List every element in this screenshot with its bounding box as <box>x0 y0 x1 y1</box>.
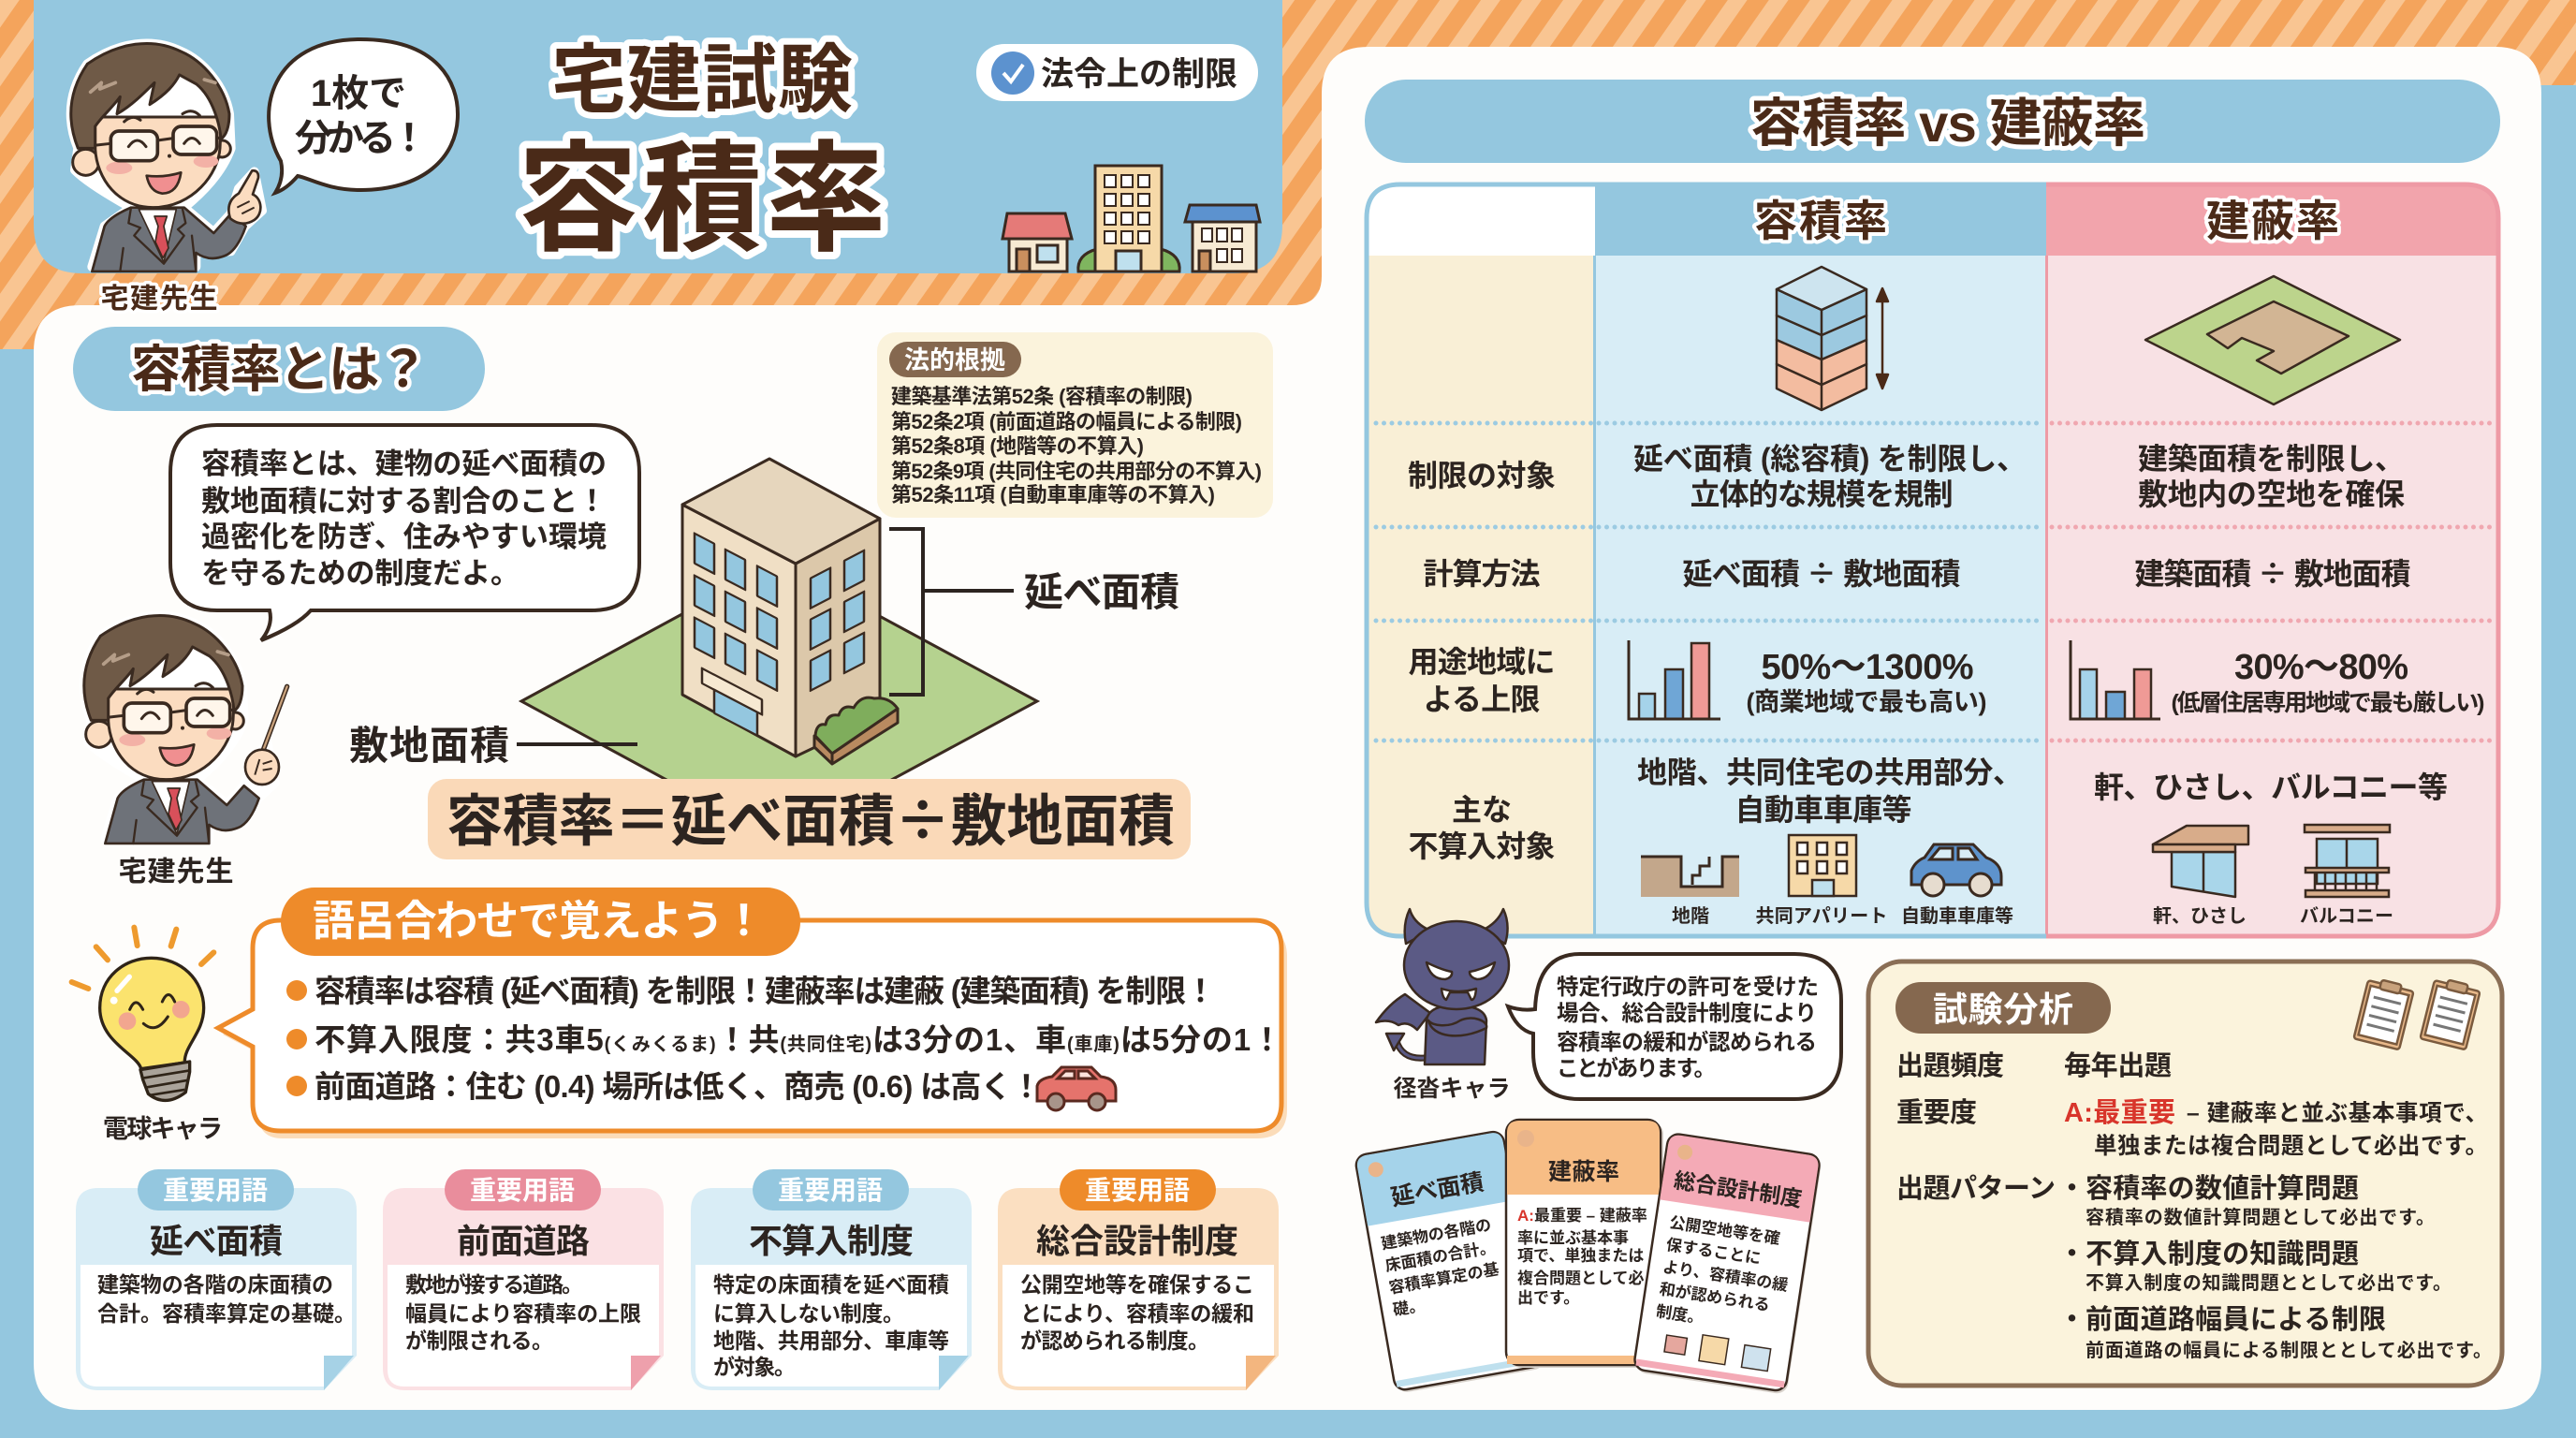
bracket: total floor area <box>889 529 1014 695</box>
card: building coverage: 複合問題として必 <box>1517 1269 1644 1287</box>
heading tag: 語呂合わせで覚えよう！ <box>313 897 765 945</box>
term card: front road: が制限される。 <box>405 1328 553 1353</box>
panel: exam analysis: ・ <box>2058 1240 2086 1269</box>
term card: comprehensive design: が認められる制度。 <box>1020 1328 1209 1353</box>
row: zoning limits: 30%〜80% <box>2234 648 2408 687</box>
row: calculation: 建築面積 ÷ 敷地面積 <box>2134 550 2411 594</box>
term card: total floor area: 延べ面積 <box>150 1222 283 1260</box>
illustration: building on site <box>349 459 1179 841</box>
panel: legal basis <box>877 332 1273 518</box>
label: total floor area: 延べ面積 <box>1024 570 1179 614</box>
card: building coverage: 建蔽率 <box>1548 1159 1619 1185</box>
panel: exam analysis: A:最重要 <box>2064 1097 2175 1128</box>
panel: exam analysis: 不算入制度の知識問題 <box>2086 1239 2359 1269</box>
panel: exam analysis: 前面道路の幅員による制限ととして必出です。 <box>2086 1340 2492 1361</box>
card: comprehensive design: 保することに <box>1665 1236 1762 1268</box>
term card: front road: 敷地が接する道路。 <box>405 1272 583 1297</box>
card: comprehensive design: 総合設計制度 <box>1673 1168 1804 1211</box>
label: devil name: 径沓キャラ <box>1393 1076 1511 1102</box>
badge: legal restrictions: 法令上の制限 <box>1041 56 1237 93</box>
term card: total floor area <box>76 1169 357 1390</box>
icon: blue car <box>1911 844 2001 896</box>
tag: exam analysis: 試験分析 <box>1933 990 2073 1029</box>
term card: exclusion system: 重要用語 <box>778 1176 883 1205</box>
heading bar: FAR vs BCR: 容積率 vs 建蔽率 <box>1750 94 2145 153</box>
card: comprehensive design: 制度。 <box>1655 1302 1705 1328</box>
label: balcony: バルコニー <box>2300 905 2393 927</box>
planter <box>815 697 898 754</box>
card: comprehensive design: より、容積率の緩 <box>1661 1257 1790 1295</box>
speech bubble: one page: 1枚で <box>311 73 406 114</box>
row: calculation <box>1423 550 2411 594</box>
row: restricted target: 敷地内の空地を確保 <box>2138 477 2405 511</box>
column header: BCR: 建蔽率 <box>2206 197 2339 245</box>
icon: apartment <box>1789 835 1856 896</box>
card: building coverage: 項で、単独または <box>1517 1247 1644 1265</box>
term card: exclusion system: が対象。 <box>713 1355 796 1379</box>
table backgrounds <box>1365 183 2500 938</box>
row: restricted target <box>1408 442 2405 511</box>
panel: exam analysis: ・ <box>2058 1174 2086 1204</box>
term card: exclusion system: 特定の床面積を延べ面積 <box>713 1272 949 1297</box>
term card: comprehensive design: 重要用語 <box>1085 1176 1190 1205</box>
label: eaves: 軒、ひさし <box>2153 905 2247 927</box>
panel: exam analysis: 重要度 <box>1896 1097 1977 1128</box>
panel: exam analysis: 単独または複合問題として必出です。 <box>2094 1133 2488 1159</box>
card: total floor area: 床面積の合計。 <box>1383 1239 1497 1275</box>
speech bubble: definition: を守るための制度だよ。 <box>201 557 520 590</box>
term card: exclusion system: 不算入制度 <box>749 1222 914 1260</box>
term card: exclusion system <box>691 1169 972 1390</box>
title: exam name: 宅建試験 <box>551 38 853 122</box>
row: exclusions: 軒、ひさし、バルコニー等 <box>2094 770 2448 804</box>
panel: exam analysis: 不算入制度の知識問題ととして必出です。 <box>2086 1272 2452 1294</box>
card: comprehensive design: 和が認められる <box>1659 1279 1771 1314</box>
icon: red car <box>1037 1067 1116 1110</box>
heading bar: FAR vs BCR <box>1365 80 2500 163</box>
speech bubble: relaxation note <box>1508 954 1841 1099</box>
speech bubble: definition: 敷地面積に対する割合のこと！ <box>201 485 607 518</box>
row: exclusions: 地階、共同住宅の共用部分、 <box>1637 756 2023 789</box>
card: comprehensive design <box>1632 1133 1822 1395</box>
row: exclusions: 不算入対象 <box>1408 829 1556 863</box>
icon: town buildings <box>1003 166 1260 271</box>
character: teacher with pointer <box>84 615 287 844</box>
panel: mnemonics <box>218 888 1287 1138</box>
panel: mnemonics: 前面道路：住む (0.4) 場所は低く、商売 (0.6) は高く！ <box>315 1069 1042 1104</box>
term card: exclusion system: に算入しない制度。 <box>713 1301 904 1326</box>
card: total floor area: 建築物の各階の <box>1380 1215 1493 1253</box>
term card: exclusion system: 地階、共用部分、車庫等 <box>713 1328 949 1353</box>
label: apartment: 共同アパリート <box>1756 905 1887 927</box>
icon: stacked floors <box>1777 267 1888 410</box>
panel: legal basis: 第52条2項 (前面道路の幅員による制限) <box>891 410 1242 433</box>
speech bubble: relaxation note: 特定行政庁の許可を受けた <box>1557 975 1819 999</box>
speech bubble: definition <box>170 425 639 640</box>
speech bubble: definition: 容積率とは、建物の延べ面積の <box>201 448 607 480</box>
panel: legal basis: 第52条11項 (自動車車庫等の不算入) <box>891 483 1215 506</box>
row: calculation: 延べ面積 ÷ 敷地面積 <box>1683 550 1960 594</box>
speech bubble: relaxation note: ことがあります。 <box>1557 1055 1716 1080</box>
panel: exam analysis: 容積率の数値計算問題として必出です。 <box>2086 1207 2435 1228</box>
row: exclusions <box>1408 756 2448 927</box>
tag: exam analysis <box>1895 982 2111 1034</box>
term card: front road: 前面道路 <box>457 1222 590 1260</box>
panel: mnemonics: 容積率は容積 (延べ面積) を制限！建蔽率は建蔽 (建築面積) を制限！ <box>315 974 1216 1008</box>
speech bubble: relaxation note: 場合、総合設計制度により <box>1557 1001 1817 1025</box>
card: total floor area <box>1354 1130 1545 1394</box>
row: exclusions: 自動車車庫等 <box>1735 793 1911 827</box>
term card: front road: 重要用語 <box>470 1176 575 1205</box>
term card: comprehensive design <box>998 1169 1279 1390</box>
heading tag <box>281 888 800 956</box>
icon: eaves <box>2153 826 2248 897</box>
term card: total floor area: 重要用語 <box>163 1176 268 1205</box>
bar chart: BCR <box>2071 640 2160 719</box>
panel: legal basis: 第52条9項 (共同住宅の共用部分の不算入) <box>891 460 1262 483</box>
character: devil <box>1376 909 1509 1064</box>
striped orange header band <box>0 0 2576 349</box>
speech bubble: one page <box>269 39 458 193</box>
character: light bulb <box>72 928 213 1100</box>
term card: total floor area: 建築物の各階の床面積の <box>97 1272 333 1297</box>
card: building coverage: 出です。 <box>1517 1289 1579 1307</box>
term card: total floor area: 合計。容積率算定の基礎。 <box>97 1301 356 1326</box>
card: building coverage: 率に並ぶ基本事 <box>1517 1229 1629 1247</box>
speech bubble: relaxation note: 容積率の緩和が認められる <box>1557 1029 1817 1054</box>
row: zoning limits: (低層住居専用地域で最も厳しい) <box>2172 690 2484 716</box>
building <box>682 459 898 764</box>
row: restricted target: 建築面積を制限し、 <box>2138 442 2405 476</box>
speech bubble: definition: 過密化を防ぎ、住みやすい環境 <box>201 521 607 553</box>
row: restricted target: 延べ面積 (総容積) を制限し、 <box>1633 442 2027 476</box>
header panel <box>34 0 1282 273</box>
heading: what is FAR <box>73 327 485 411</box>
card: building coverage: A:最重要 – 建蔽率 <box>1517 1207 1647 1225</box>
title: floor area ratio: 容積率 <box>519 133 886 267</box>
label: bulb character: 電球キャラ <box>103 1115 223 1143</box>
panel: exam analysis: – 建蔽率と並ぶ基本事項で、 <box>2187 1100 2488 1126</box>
panel: exam analysis: 前面道路幅員による制限 <box>2086 1304 2386 1335</box>
heading: what is FAR: 容積率とは？ <box>131 342 429 398</box>
card: total floor area: 容積率算定の基 <box>1387 1259 1500 1298</box>
panel: legal basis: 第52条8項 (地階等の不算入) <box>891 434 1144 458</box>
icon: balcony <box>2305 825 2390 897</box>
card: comprehensive design: 公開空地等を確 <box>1668 1212 1781 1248</box>
panel: exam analysis: 毎年出題 <box>2064 1050 2172 1081</box>
icon: clipboards <box>2353 976 2481 1049</box>
formula box: 容積率＝延べ面積÷敷地面積 <box>446 776 1175 858</box>
row: zoning limits: (商業地域で最も高い) <box>1747 688 1986 716</box>
icon: site coverage <box>2145 276 2400 404</box>
icon: basement <box>1641 857 1739 897</box>
card: total floor area: 延べ面積 <box>1389 1169 1486 1211</box>
label: basement: 地階 <box>1672 905 1709 927</box>
term card: front road: 幅員により容積率の上限 <box>405 1301 641 1326</box>
panel: exam analysis: 出題パターン <box>1896 1173 2056 1204</box>
label: garage: 自動車車庫等 <box>1901 905 2013 927</box>
panel: exam analysis: ・ <box>2058 1305 2086 1335</box>
label: site area: 敷地面積 <box>349 724 509 768</box>
leader line: site area <box>517 742 637 746</box>
term card: comprehensive design: 公開空地等を確保するこ <box>1020 1272 1254 1297</box>
panel: legal basis: 建築基準法第52条 (容積率の制限) <box>891 385 1193 408</box>
column header: FAR: 容積率 <box>1754 197 1887 245</box>
row: zoning limits: 50%〜1300% <box>1762 648 1973 687</box>
site ground <box>521 562 1037 841</box>
term card: comprehensive design: 総合設計制度 <box>1036 1222 1238 1260</box>
row: zoning limits: よる上限 <box>1423 682 1541 716</box>
character: teacher in header <box>71 43 262 271</box>
row: restricted target: 制限の対象 <box>1408 459 1556 492</box>
panel: exam analysis <box>1868 961 2502 1386</box>
panel: exam analysis: 出題頻度 <box>1896 1050 2004 1081</box>
label: teacher name: 宅建先生 <box>101 284 217 315</box>
tag: legal basis <box>889 342 1021 377</box>
term card: front road <box>383 1169 664 1390</box>
term card: comprehensive design: とにより、容積率の緩和 <box>1020 1301 1254 1326</box>
panel: mnemonics: 不算入限度：共3車5(くみくるま)！共(共同住宅)は3分の1、車(車庫)は5分の1！ <box>315 1022 1282 1057</box>
panel: exam analysis: 容積率の数値計算問題 <box>2086 1173 2359 1204</box>
speech bubble: one page: 分かる！ <box>295 118 428 159</box>
bar chart: FAR <box>1629 640 1720 719</box>
comparison table <box>1365 183 2500 938</box>
row: exclusions: 主な <box>1452 793 1512 827</box>
row: restricted target: 立体的な規模を規制 <box>1690 477 1953 511</box>
row: calculation: 計算方法 <box>1423 557 1541 591</box>
card: building coverage <box>1506 1120 1663 1368</box>
badge: legal restrictions <box>976 44 1258 101</box>
row: zoning limits <box>1408 640 2484 719</box>
label: teacher name 2: 宅建先生 <box>118 857 234 888</box>
row: zoning limits: 用途地域に <box>1408 645 1556 679</box>
tag: legal basis: 法的根拠 <box>904 346 1005 374</box>
card: total floor area: 礎。 <box>1392 1297 1426 1319</box>
